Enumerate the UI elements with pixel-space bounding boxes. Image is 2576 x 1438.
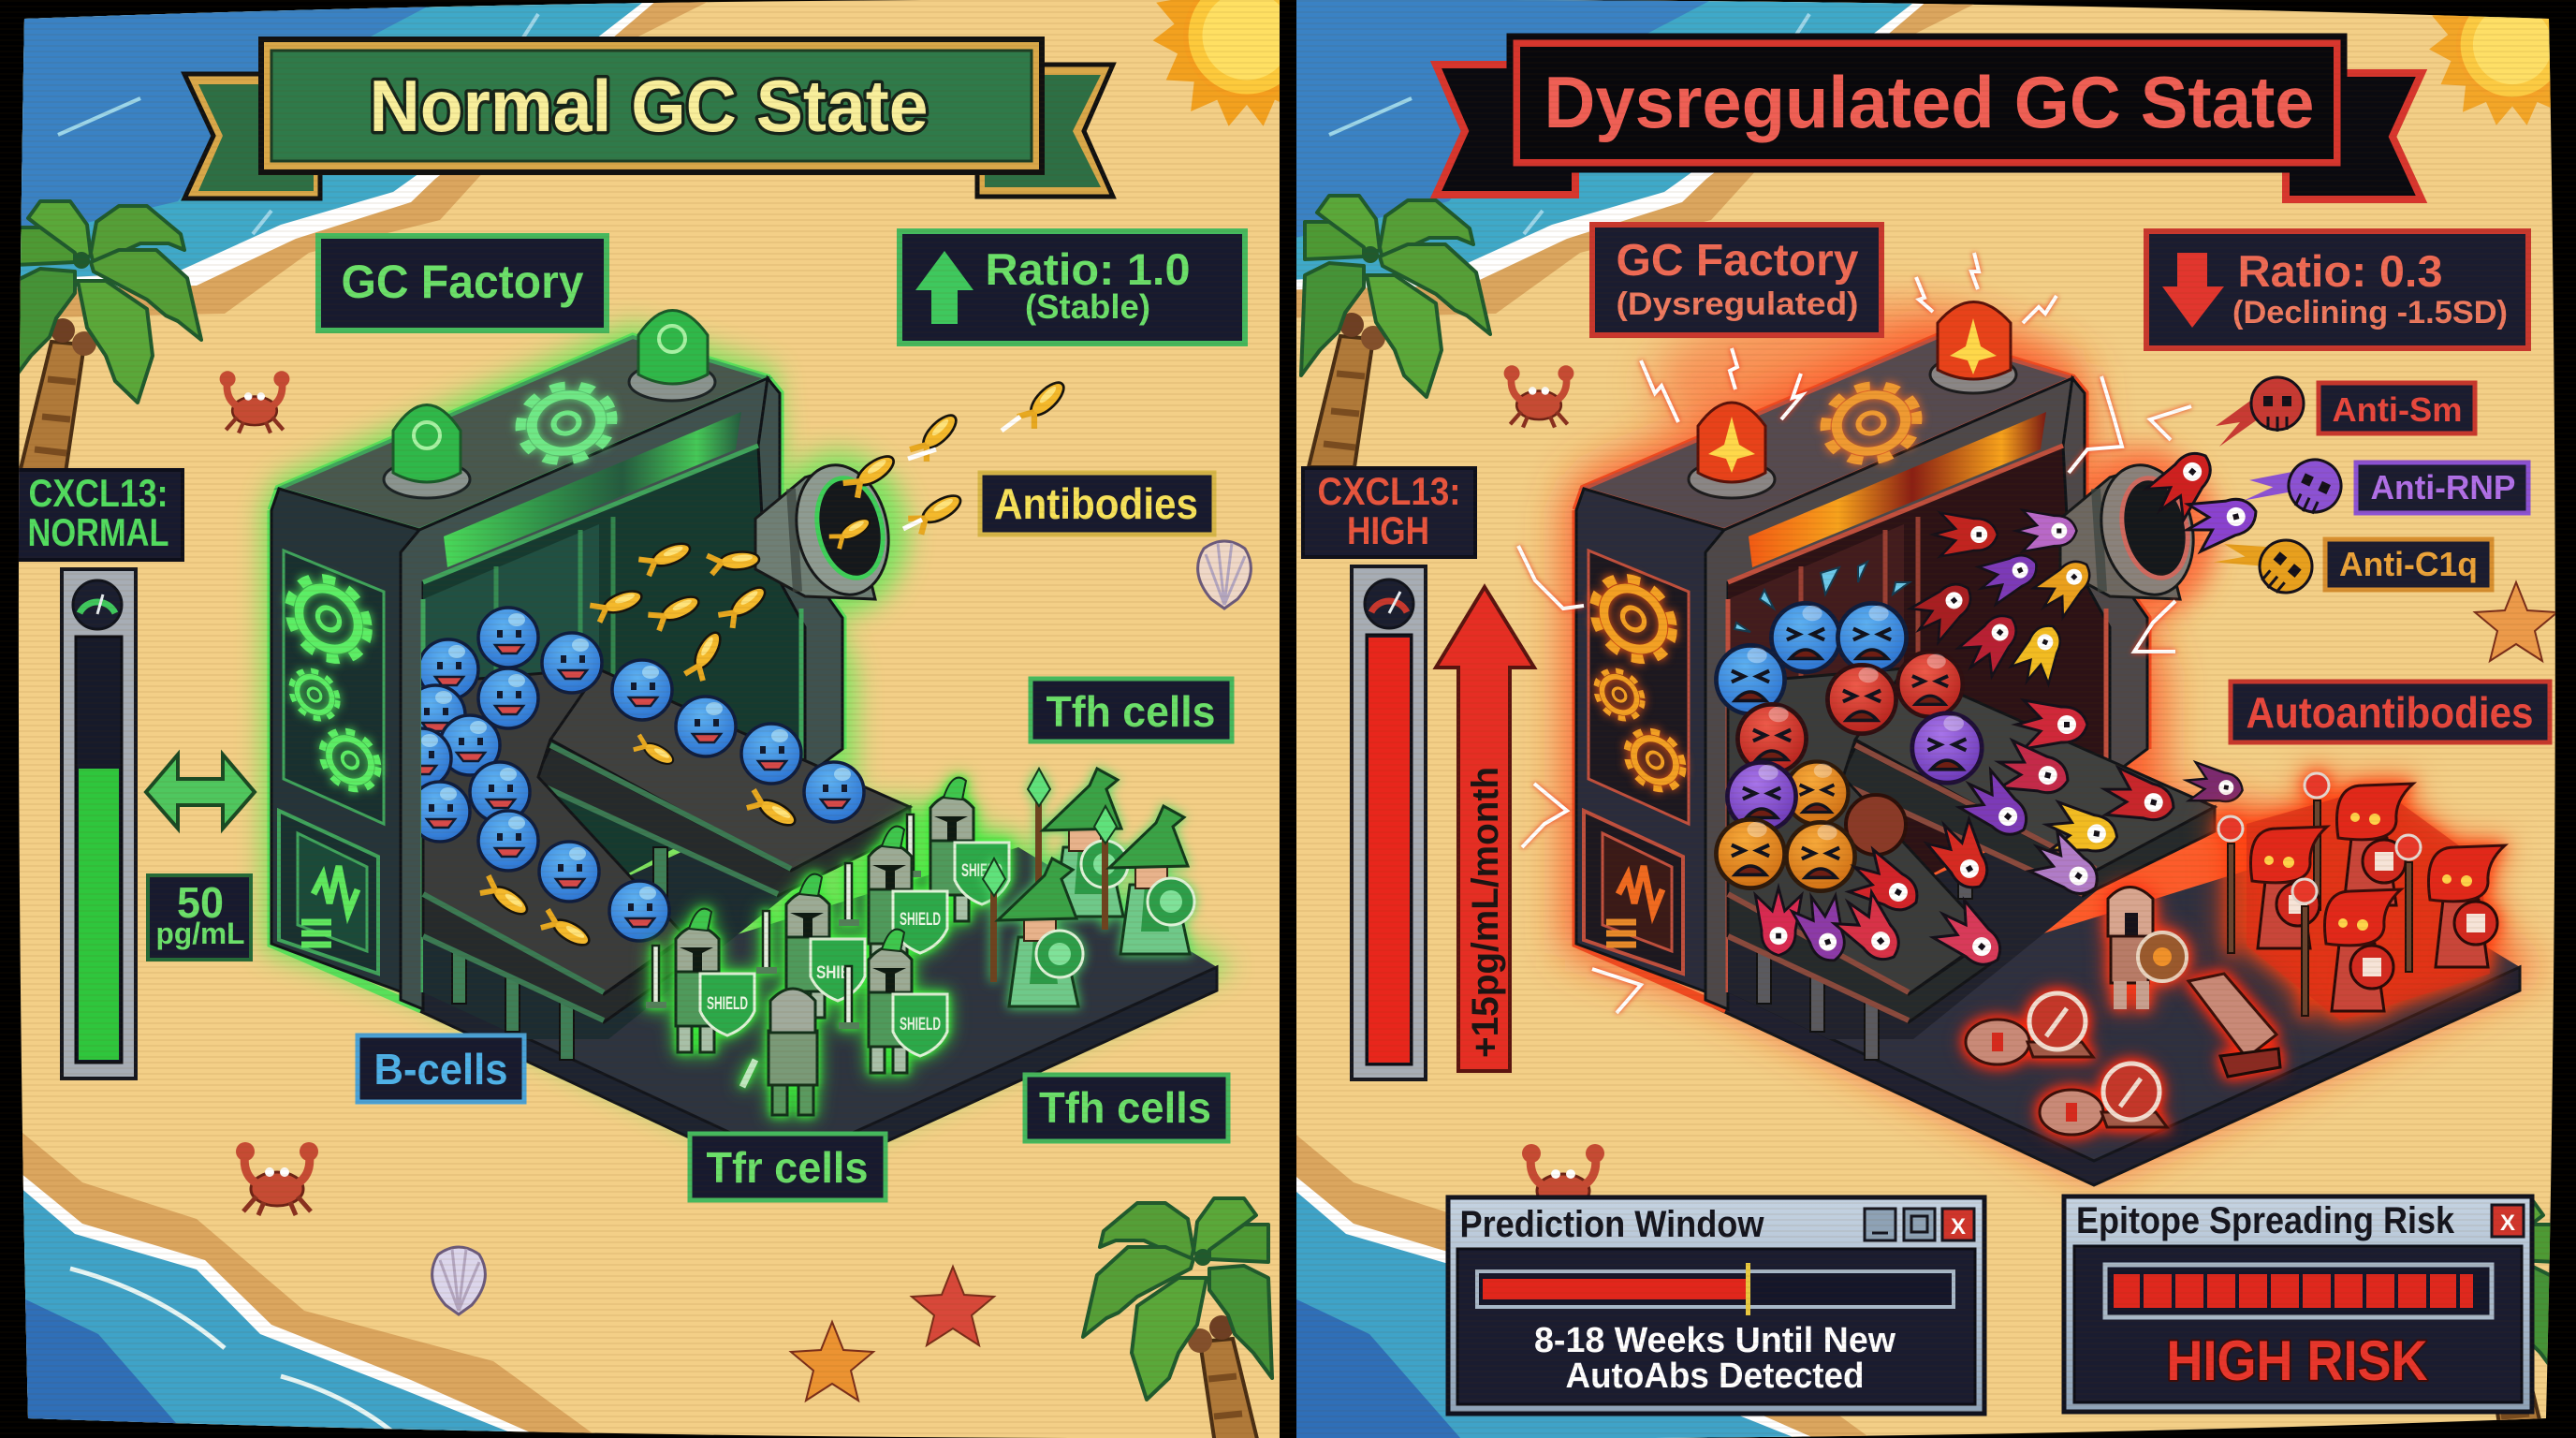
rising trend arrow	[1436, 587, 1534, 1071]
top glow around sirens	[1652, 304, 2064, 463]
label: Tfh cells bottom	[1025, 1075, 1228, 1141]
window: prediction: AutoAbs Detected	[1565, 1357, 1865, 1396]
isometric floor platform	[1715, 847, 2520, 1185]
heading: Normal GC State	[369, 65, 929, 147]
Tfr knights	[646, 778, 1009, 1115]
arrow down	[2162, 253, 2224, 328]
panel: dysregulated GC state	[1271, 0, 2576, 1438]
label: Tfr cells	[690, 1134, 886, 1200]
window: epitope spreading risk: HIGH RISK	[2166, 1329, 2428, 1392]
icon: sun	[2429, 0, 2576, 125]
segmented risk bar	[2105, 1265, 2492, 1317]
label: GC Factory: GC Factory	[341, 256, 584, 308]
cannon	[2060, 457, 2205, 603]
callout: ratio declining: Ratio: 0.3	[2237, 246, 2443, 296]
lightning bolts	[1518, 253, 2191, 1013]
label: Anti-C1q: Anti-C1q	[2339, 545, 2478, 583]
readout: 50 pg/mL: pg/mL	[155, 917, 245, 950]
cannon glow	[768, 451, 908, 616]
sand background	[1288, 0, 2576, 1438]
skull: Anti-C1q	[2211, 506, 2322, 616]
label: CXCL13 high	[1303, 468, 1475, 557]
label: Tfr cells: Tfr cells	[706, 1143, 869, 1192]
flying autoantibodies	[2142, 440, 2262, 553]
autoreactive blobs	[1716, 603, 1982, 891]
antibodies inside factory	[477, 515, 874, 952]
label: Anti-RNP	[2356, 462, 2528, 513]
icon: large crab	[236, 1142, 318, 1215]
window: epitope spreading risk	[2064, 1196, 2532, 1412]
icon: starfish orange	[791, 1322, 873, 1401]
B-cells blue blobs	[391, 608, 801, 941]
window: prediction: Prediction Window	[1460, 1204, 1764, 1245]
GC factory machine	[271, 337, 842, 1020]
title banner: dysregulated	[1436, 37, 2422, 199]
icon: palm tree top-left	[12, 201, 201, 473]
skull rockets on belts	[1755, 510, 2180, 978]
label: GC Factory dysregulated	[1592, 225, 1881, 335]
isometric floor platform	[419, 847, 1219, 1142]
rising trend arrow: +15pg/mL/month	[1465, 767, 1506, 1058]
side gear icons	[1594, 569, 1683, 796]
progress bar	[1477, 1263, 1954, 1315]
sand background	[0, 0, 1288, 1438]
icon: shell lilac	[432, 1247, 485, 1314]
label: Tfh cells bottom: Tfh cells	[1039, 1083, 1211, 1132]
panel: normal GC state	[0, 0, 1340, 1438]
icon: small crab	[220, 371, 289, 433]
label: CXCL13 normal: CXCL13:	[28, 471, 168, 515]
icon: sun	[1153, 0, 1280, 126]
icon: small crab	[1504, 365, 1573, 428]
label: B-cells	[358, 1035, 524, 1102]
window buttons	[1865, 1209, 1974, 1240]
callout: ratio stable: Ratio: 1.0	[985, 244, 1191, 294]
roof gear icon	[1817, 376, 1925, 470]
roof gear icon	[512, 376, 621, 470]
label: Anti-RNP: Anti-RNP	[2370, 468, 2516, 506]
skull: Anti-RNP	[2241, 436, 2349, 536]
gauge: CXCL13 high	[1352, 566, 1426, 1079]
window: prediction: 8-18 Weeks Until New	[1534, 1321, 1895, 1360]
conveyor belts	[423, 668, 910, 1060]
label: B-cells: B-cells	[374, 1045, 507, 1093]
heading: Dysregulated GC State	[1544, 61, 2314, 143]
icon: palm tree top-left	[1301, 196, 1490, 467]
corrupted Tfh wizards	[2218, 773, 2505, 1020]
window: epitope spreading risk: Epitope Spreading Risk	[2076, 1200, 2455, 1241]
roof window strip	[1749, 412, 2046, 567]
arrow up	[915, 251, 973, 324]
callout: ratio stable: (Stable)	[1025, 287, 1150, 326]
green dome light right	[629, 311, 715, 401]
label: Anti-C1q	[2325, 539, 2492, 590]
banner ribbon tails	[1436, 65, 2422, 199]
label: CXCL13 high: HIGH	[1347, 508, 1429, 552]
side monitor readout	[301, 866, 358, 945]
title banner: normal	[184, 39, 1113, 198]
B-cell blob at conveyor end	[804, 762, 864, 822]
bottom-left ocean	[1271, 1114, 1870, 1438]
bottom-left ocean	[22, 1133, 593, 1433]
icon: shell cream	[1198, 541, 1251, 609]
antibody cannon	[754, 463, 890, 601]
label: Anti-Sm	[2319, 383, 2475, 433]
window: prediction	[1448, 1197, 1984, 1414]
top-left ocean	[1271, 0, 1983, 318]
Tfr knights: SHIELD	[961, 861, 1003, 881]
icon: starfish	[2475, 582, 2557, 661]
callout: ratio stable	[900, 231, 1245, 344]
label: GC Factory dysregulated: (Dysregulated)	[1616, 286, 1859, 322]
sweat drops	[1734, 562, 1910, 632]
conveyor belts	[1728, 668, 2215, 1060]
icon: starfish red	[912, 1267, 994, 1345]
close button: X	[2500, 1211, 2515, 1236]
GC factory machine	[1576, 337, 2147, 1020]
red siren left	[1689, 403, 1775, 498]
Tfr knights: SHIELD	[900, 1015, 941, 1034]
label: Anti-Sm: Anti-Sm	[2333, 390, 2462, 429]
label: GC Factory	[318, 236, 607, 330]
gauge: CXCL13 level	[62, 569, 136, 1078]
icon: palm tree bottom-right	[2370, 1198, 2559, 1438]
callout: ratio declining	[2146, 231, 2528, 348]
window buttons: X	[1951, 1214, 1966, 1240]
top-left ocean	[0, 0, 711, 318]
label: CXCL13 high: CXCL13:	[1318, 469, 1460, 513]
label: Tfh cells top: Tfh cells	[1046, 687, 1215, 736]
skull: Anti-Sm	[2216, 377, 2304, 447]
icon: palm tree bottom-right	[1083, 1198, 1272, 1438]
label: CXCL13 normal	[15, 470, 183, 560]
label: CXCL13 normal: NORMAL	[28, 510, 168, 554]
side gear icons	[289, 569, 378, 796]
Tfr knights: SHIE	[816, 963, 850, 983]
Tfh wizards	[983, 769, 1194, 1006]
standing Tfr knight	[2108, 888, 2187, 1009]
cannon glow	[2068, 448, 2217, 620]
red siren right	[1930, 301, 2016, 393]
fallen Tfr knights	[1966, 974, 2280, 1135]
side monitor readout	[1618, 866, 1662, 913]
machine glow	[267, 328, 1224, 1168]
close button	[2492, 1205, 2524, 1237]
double arrow	[146, 755, 255, 829]
Tfr knights: SHIELD	[707, 994, 748, 1014]
readout: 50 pg/mL: 50	[177, 878, 224, 927]
banner ribbon tails	[184, 65, 1113, 198]
green dome light left	[384, 404, 470, 498]
label: Antibodies: Antibodies	[994, 479, 1198, 528]
roof window strip	[444, 412, 741, 567]
callout: ratio declining: (Declining -1.5SD)	[2232, 295, 2508, 330]
readout: 50 pg/mL	[148, 875, 251, 960]
stray skull rocket	[2183, 761, 2246, 810]
label: Autoantibodies: Autoantibodies	[2247, 688, 2533, 737]
label: Tfh cells top	[1031, 679, 1232, 741]
Tfr knights: SHIELD	[900, 910, 941, 930]
monitor data lines	[1606, 922, 1636, 945]
icon: large crab	[1522, 1144, 1604, 1217]
machine glow	[1572, 328, 2529, 1168]
label: GC Factory dysregulated: GC Factory	[1616, 236, 1859, 286]
antibodies flying out	[842, 377, 1071, 536]
